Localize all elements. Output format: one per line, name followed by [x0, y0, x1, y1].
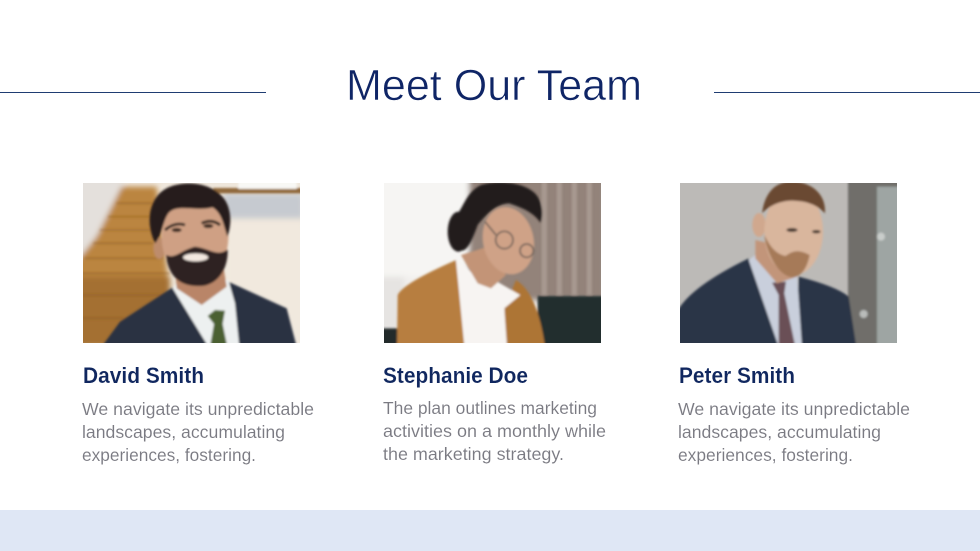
photo: David Smith — [83, 183, 300, 343]
description: David Smith: We navigate its unpredictable — [82, 399, 314, 419]
description: Stephanie Doe: The plan outlines marketing — [383, 398, 597, 418]
eyes — [165, 224, 185, 230]
face — [482, 204, 536, 276]
description: Peter Smith — [678, 399, 910, 465]
tie — [772, 282, 795, 347]
bun — [446, 210, 463, 254]
description: Stephanie Doe: the marketing strategy. — [383, 444, 564, 464]
neck — [461, 247, 506, 288]
beard — [166, 247, 228, 286]
description: Stephanie Doe — [383, 398, 606, 464]
hair — [762, 182, 825, 213]
hair — [453, 182, 542, 251]
tie — [208, 310, 227, 347]
neck — [175, 267, 227, 305]
description: Peter Smith: We navigate its unpredictable — [678, 399, 910, 419]
photo: Peter Smith — [680, 183, 897, 343]
suit — [677, 258, 780, 347]
glasses — [485, 222, 533, 257]
photo: Stephanie Doe — [384, 183, 601, 343]
description: Stephanie Doe: activities on a monthly while — [383, 421, 606, 441]
face — [160, 206, 230, 260]
hair — [150, 184, 230, 243]
eyes — [786, 228, 798, 232]
shirt — [749, 255, 802, 347]
ear — [752, 213, 766, 237]
smile — [183, 253, 208, 261]
description: David Smith — [82, 399, 314, 465]
suit — [102, 282, 297, 347]
description: Peter Smith: experiences, fostering. — [678, 445, 853, 465]
name: Stephanie Doe: Stephanie Doe — [383, 363, 528, 388]
description: Peter Smith: landscapes, accumulating — [678, 422, 881, 442]
face — [764, 199, 824, 273]
jacket — [397, 260, 464, 347]
name: Peter Smith: Peter Smith — [679, 363, 795, 388]
description: David Smith: experiences, fostering. — [82, 445, 256, 465]
neck — [754, 240, 798, 284]
name: David Smith: David Smith — [83, 363, 204, 388]
shirt — [173, 280, 239, 347]
beard — [764, 235, 810, 277]
ear — [153, 238, 165, 259]
sofa — [538, 296, 604, 346]
title: Meet Our Team — [346, 61, 642, 110]
shirt — [456, 260, 520, 347]
description: David Smith: landscapes, accumulating — [82, 422, 285, 442]
footer band — [0, 510, 980, 551]
